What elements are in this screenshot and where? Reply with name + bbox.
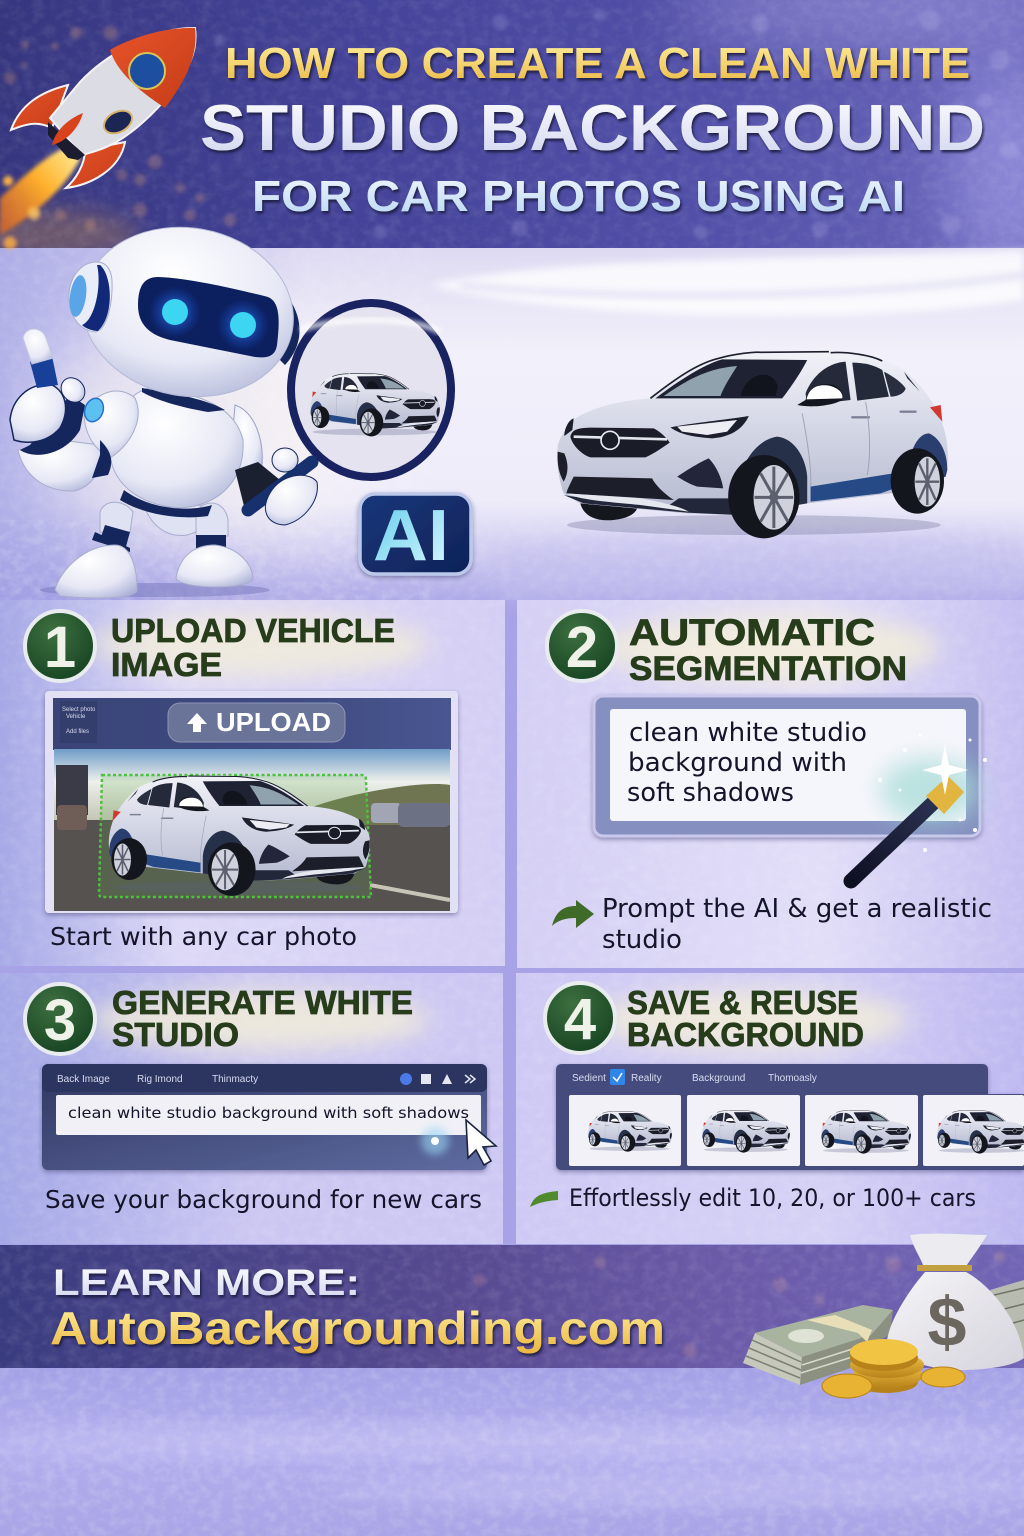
step 3 heading: GENERATE WHITE [112,984,413,1021]
step 4 badge [545,983,615,1053]
rocket [0,28,196,249]
learn more text: LEARN MORE: [53,1262,360,1303]
money illustration [743,1234,1024,1398]
step 4 badge: 4 [564,987,596,1052]
AI badge [360,494,471,576]
title [200,39,985,221]
prompt interface: clean white studio background with soft shadows [68,1104,469,1122]
robot head [67,211,307,413]
upload screenshot [45,691,458,913]
header band [0,0,1024,280]
robot right shoulder [232,405,262,482]
upload screenshot: Select photo [62,707,96,713]
cash stack [743,1280,1024,1385]
learn more text: AutoBackgrounding.com [50,1302,665,1354]
panel: step 3 [0,973,503,1244]
step 2 caption: studio [602,925,682,955]
upload screenshot: Add files [66,729,89,735]
step 4 caption: Effortlessly edit 10, 20, or 100+ cars [569,1184,976,1212]
learn more text [50,1262,665,1354]
money bag [887,1234,1024,1370]
robot mascot [10,211,307,598]
magnifying glass [235,303,451,525]
footer band [0,1245,1024,1368]
prompt interface: Back Image [57,1074,110,1085]
gold coins [822,1339,965,1398]
gallery interface [556,1064,1024,1170]
title: HOW TO CREATE A CLEAN WHITE [225,39,970,88]
parking lot photo [54,749,450,911]
step 2 heading: AUTOMATIC [629,612,875,653]
money bag: $ [928,1283,966,1361]
prompt card: soft shadows [627,778,794,808]
gallery interface: Reality [631,1073,662,1084]
prompt card [594,696,980,836]
gallery interface: Thomoasly [768,1073,817,1084]
step 1 heading: IMAGE [111,646,222,683]
step 4 heading [627,984,864,1053]
step 3 caption: Save your background for new cars [45,1185,482,1214]
hero car [557,351,948,538]
prompt card: clean white studio [629,718,867,748]
robot torso [110,388,243,517]
prompt interface [42,1064,487,1170]
title: FOR CAR PHOTOS USING AI [252,172,905,221]
step 4 heading: BACKGROUND [627,1016,864,1053]
panel: step 2 [517,600,1024,968]
step 2 badge: 2 [566,615,598,680]
gallery interface: Background [692,1073,745,1084]
step 3 badge: 3 [44,988,76,1053]
robot left arm pointing [10,329,138,491]
hero scene panel [0,248,1024,600]
gallery interface: Sedient [572,1073,606,1084]
step 4 heading: SAVE & REUSE [627,984,858,1021]
AI badge: AI [373,496,449,576]
title: STUDIO BACKGROUND [200,91,985,164]
rocket flame [0,145,80,249]
cursor [466,1120,496,1165]
step 3 badge [25,984,95,1054]
step 2 caption [602,894,992,955]
step 2 heading: SEGMENTATION [629,650,907,688]
step 3 heading: STUDIO [112,1016,239,1053]
step 2 heading [629,612,907,688]
prompt interface: Thinmacty [212,1074,258,1085]
step 1 heading: UPLOAD VEHICLE [111,612,395,649]
magic wand [851,734,987,881]
robot legs and feet [40,502,270,598]
panel: step 1 [0,600,505,966]
upload button: UPLOAD [216,707,331,737]
upload button [168,703,345,742]
step 2 caption: Prompt the AI & get a realistic [602,894,992,924]
arrow icon [552,900,594,928]
car thumbnails [569,1095,1024,1166]
step 1 badge [25,611,95,681]
upload screenshot: Vehicle [66,714,86,720]
step 2 badge [547,611,617,681]
check arrow icon [530,1191,558,1207]
step 1 badge: 1 [44,615,76,680]
step 3 heading [112,984,413,1053]
step 1 caption: Start with any car photo [50,922,357,951]
magnifier handle in robot hand [235,448,317,525]
prompt card: background with [628,748,847,778]
panel: step 4 [516,973,1024,1244]
prompt interface: Rig Imond [137,1074,183,1085]
green selection outline [99,775,371,897]
step 1 heading [111,612,395,683]
